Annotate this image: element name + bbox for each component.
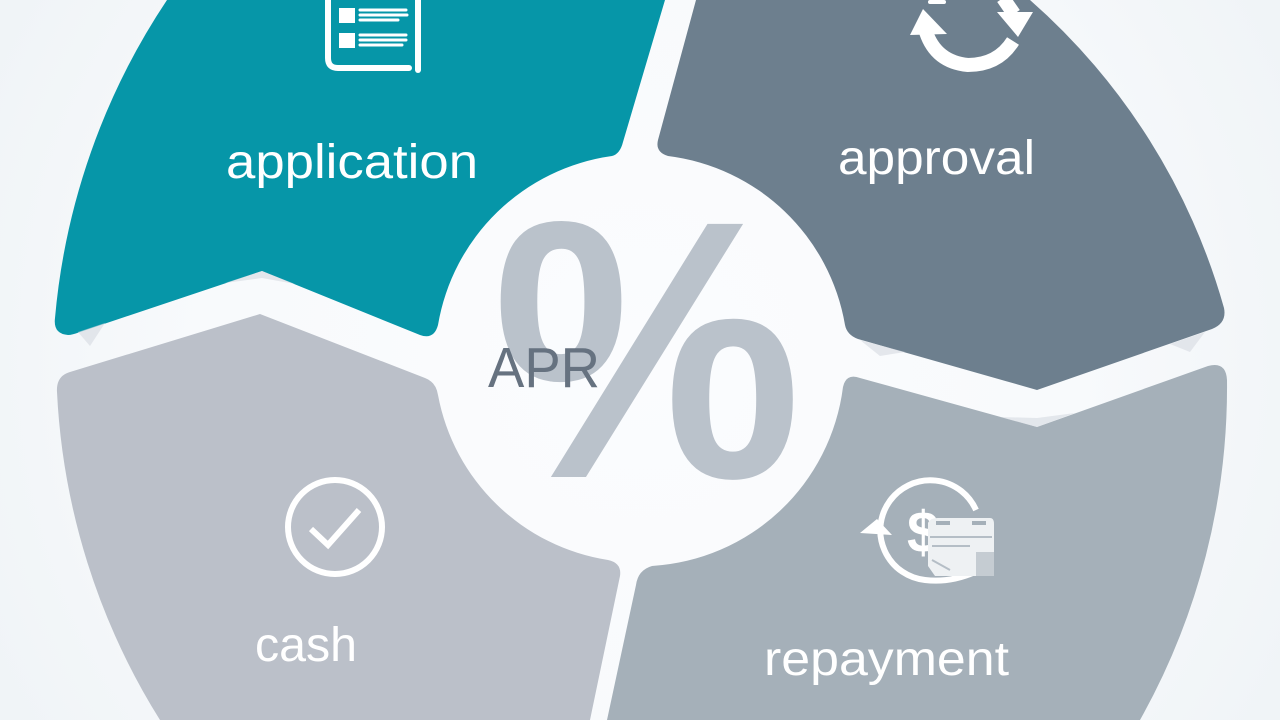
label: cash: cash (255, 619, 357, 672)
label: approval: approval (838, 132, 1035, 185)
label: repayment: repayment (764, 633, 1009, 686)
segment: repayment (607, 365, 1227, 720)
center percent symbol: % (492, 144, 802, 555)
icon: application form (328, 0, 418, 70)
label: application: application (226, 136, 478, 189)
icon: repayment dollar and card (860, 480, 994, 581)
icon: repayment dollar and card: $ (907, 500, 939, 565)
segment: application (55, 0, 665, 336)
icon: circular arrows (910, 0, 1033, 65)
segment: approval (657, 0, 1224, 390)
icon: check mark (288, 480, 382, 574)
center label: APR: APR (488, 336, 600, 400)
segment: cash (57, 314, 620, 720)
